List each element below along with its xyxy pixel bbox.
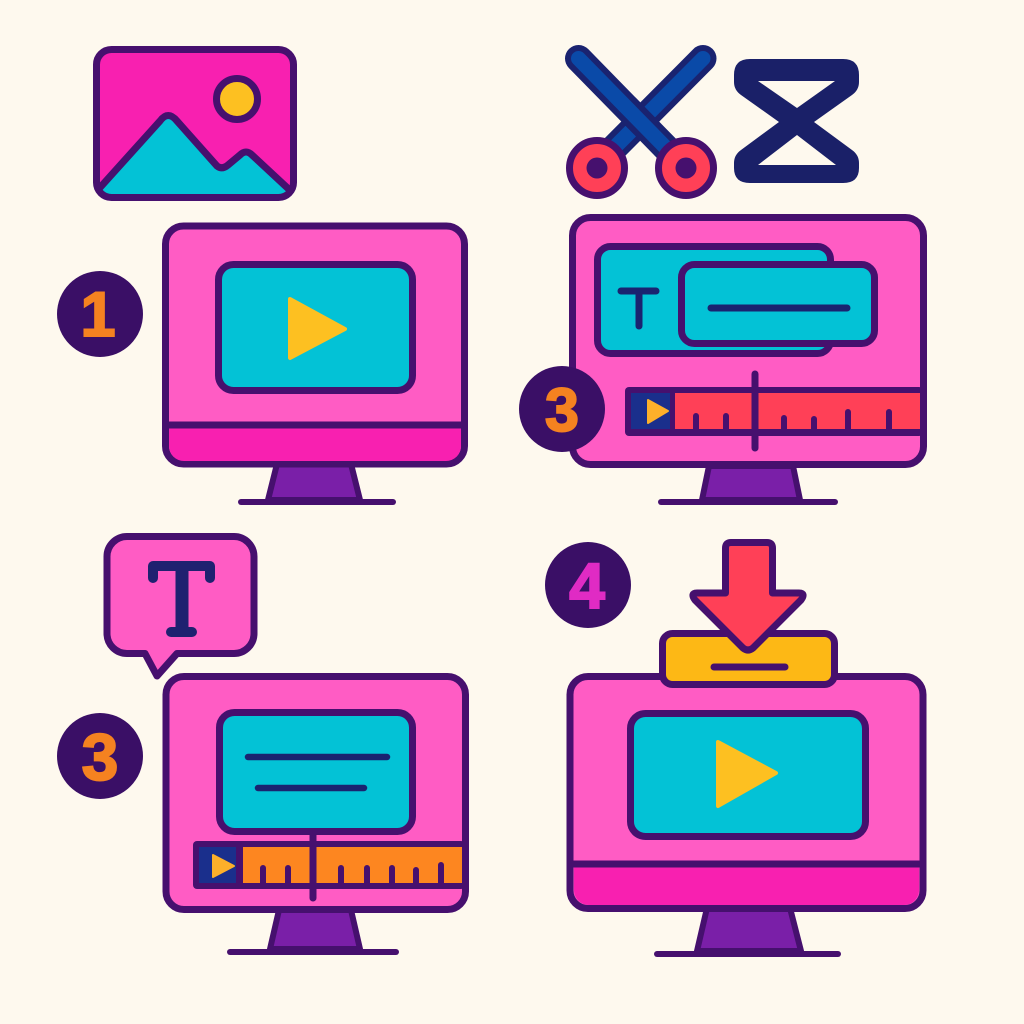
badge: number 3: 3 bbox=[545, 376, 579, 444]
icon: capcut logo bbox=[734, 59, 859, 183]
icon: small T and line bbox=[621, 291, 847, 326]
icon: scissors bbox=[570, 58, 714, 196]
icon: download tray and arrow bbox=[662, 542, 834, 684]
badge: number 4 bbox=[545, 542, 631, 628]
icon: T speech bubble bbox=[107, 536, 254, 676]
icon: monitor bbox=[166, 226, 464, 502]
panel: step 3 bbox=[57, 536, 466, 952]
badge: number 3 bbox=[57, 713, 143, 799]
timeline bbox=[193, 834, 465, 898]
icon: play triangle bbox=[718, 742, 776, 806]
text clips bbox=[598, 246, 874, 354]
panel: step 2 bbox=[519, 58, 924, 502]
icon: monitor bbox=[166, 676, 466, 952]
badge: number 3 bbox=[519, 366, 605, 452]
timeline bbox=[625, 374, 923, 448]
badge: number 4: 4 bbox=[569, 550, 605, 622]
badge: number 1: 1 bbox=[80, 280, 116, 350]
icon: monitor bbox=[570, 676, 923, 954]
icon: monitor bbox=[572, 218, 924, 502]
panel: step 1 bbox=[57, 50, 464, 502]
text lines bbox=[248, 757, 387, 788]
icon: play triangle bbox=[290, 299, 345, 358]
badge: number 1 bbox=[57, 271, 143, 357]
badge: number 3: 3 bbox=[82, 720, 118, 794]
icon: image picture bbox=[96, 50, 294, 200]
panel: step 4 bbox=[545, 542, 923, 954]
